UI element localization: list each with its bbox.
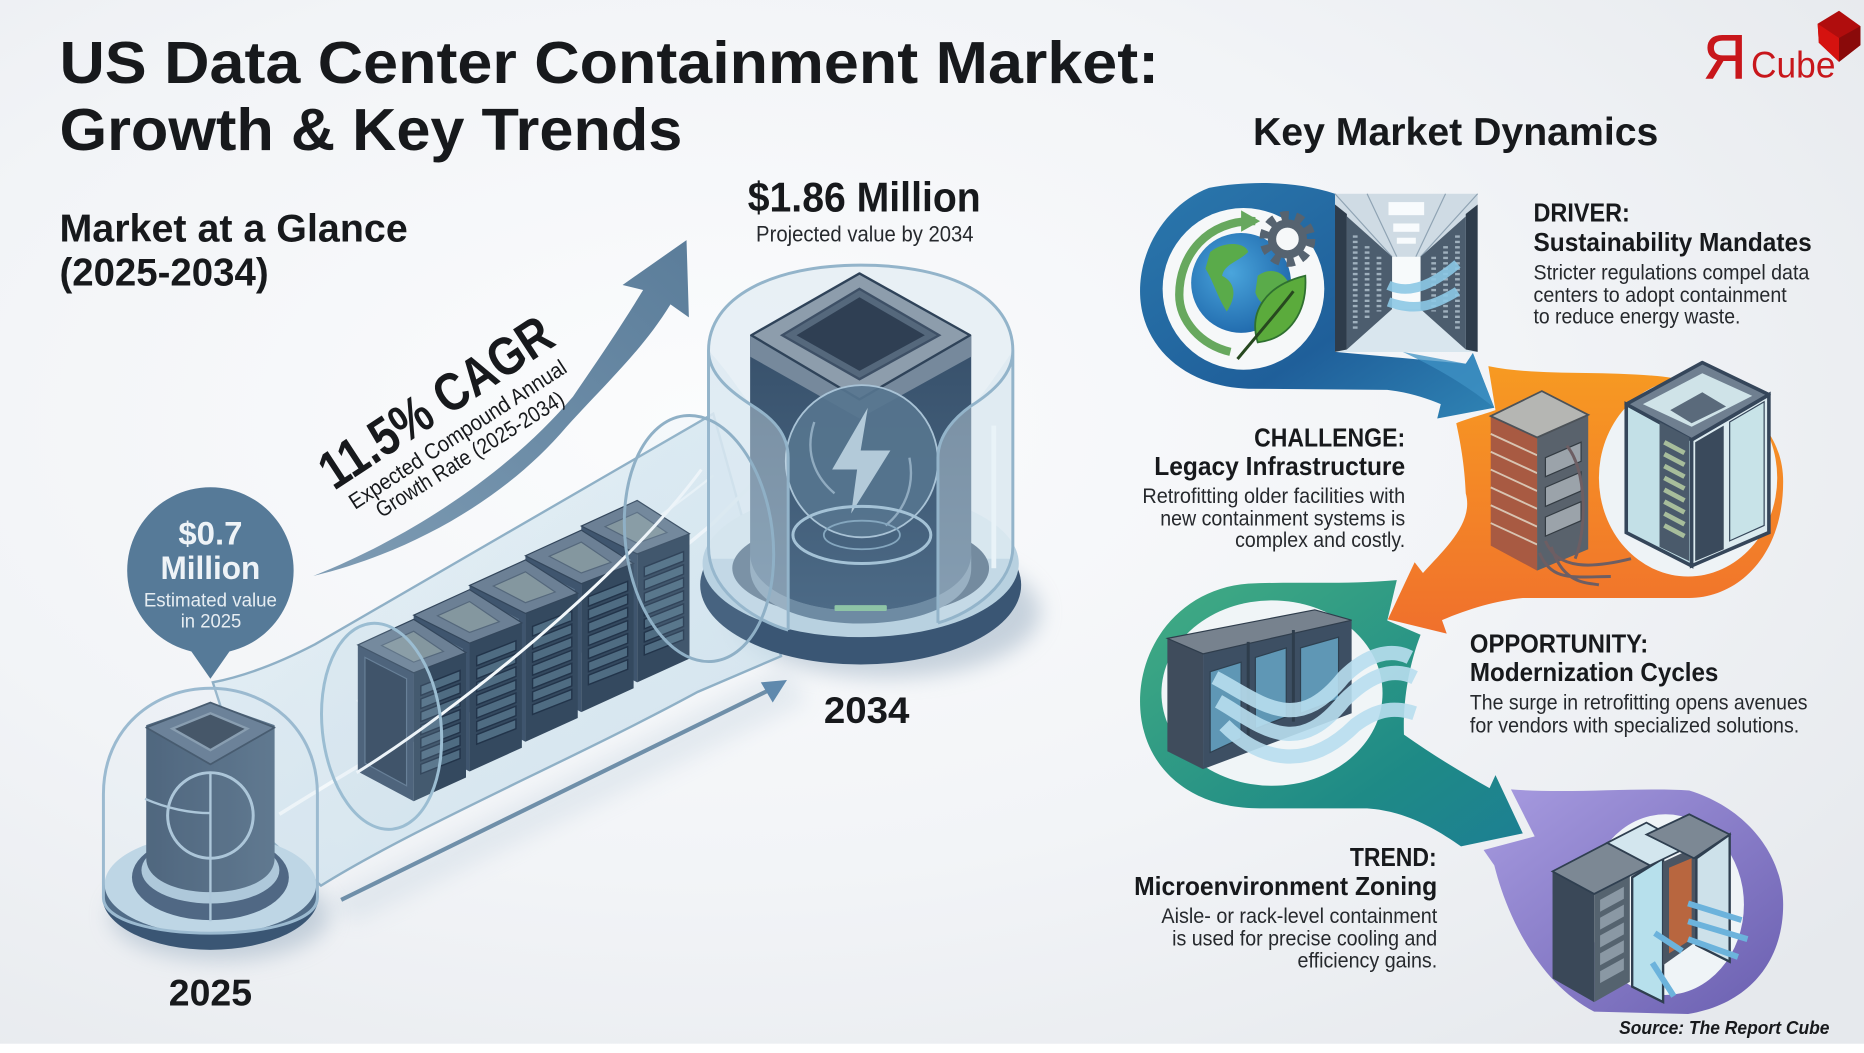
text: driver: Sustainability Mandates (1534, 227, 1812, 257)
text: trend: TREND: (1350, 842, 1437, 872)
label 2034: 2034 (824, 690, 910, 731)
text: driver (1534, 198, 1812, 328)
callout: 2034 value: $1.86 Million (748, 174, 981, 221)
arrow: growth swoosh (313, 240, 689, 576)
lower trend arrow (341, 680, 787, 900)
value bubble 2025: $0.7 (178, 515, 243, 551)
text: trend: is used for precise cooling and (1172, 927, 1437, 951)
text: driver: Stricter regulations compel data (1534, 260, 1809, 284)
text: opportunity (1470, 629, 1808, 737)
text: opportunity: OPPORTUNITY: (1470, 629, 1648, 659)
label 2025: 2025 (169, 973, 252, 1014)
heading: market at a glance: (2025-2034) (59, 250, 269, 294)
logo: RCube: Cube (1751, 44, 1835, 85)
text: challenge: CHALLENGE: (1254, 422, 1405, 452)
text: trend: Microenvironment Zoning (1134, 871, 1437, 901)
panel: opportunity shape (1140, 580, 1523, 846)
CAGR label: 11.5% CAGR (308, 305, 564, 501)
logo: RCube (1704, 11, 1860, 92)
logo: RCube: Я (1704, 23, 1746, 92)
text: challenge: new containment systems is (1160, 506, 1405, 530)
tube ring front (312, 617, 452, 835)
title: Growth & Key Trends (59, 96, 682, 163)
heading: market at a glance: Market at a Glance (59, 206, 408, 250)
tube ring end (611, 407, 787, 670)
small 2025 cylinder (102, 688, 319, 950)
value bubble 2025: in 2025 (181, 611, 241, 633)
value bubble 2025 (127, 487, 294, 679)
challenge icon: legacy rack and new cabinet (1491, 363, 1777, 585)
driver icon: earth and leaf (1163, 208, 1324, 370)
text: challenge: complex and costly. (1235, 528, 1405, 552)
text: opportunity: The surge in retrofitting opens avenues (1470, 691, 1808, 715)
text: trend: efficiency gains. (1298, 949, 1437, 973)
heading: key market dynamics: Key Market Dynamics (1253, 110, 1658, 154)
sphere with lightning (786, 385, 938, 537)
trend icon: aisle containment rack (1553, 814, 1748, 1002)
CAGR label: Expected Compound Annual (344, 355, 571, 514)
text: opportunity: Modernization Cycles (1470, 657, 1718, 687)
callout: 2034 value: Projected value by 2034 (756, 221, 974, 246)
callout: 2034 value (748, 174, 981, 246)
opportunity icon: racks with airflow (1161, 600, 1415, 786)
connecting glass tube (213, 414, 785, 886)
CAGR label: Growth Rate (2025-2034) (371, 386, 569, 523)
text: driver: centers to adopt containment (1534, 283, 1787, 307)
glass cabinet (1626, 363, 1769, 566)
panel: challenge shape (1388, 366, 1783, 634)
brick legacy rack (1491, 391, 1631, 585)
panel: driver shape (1140, 183, 1494, 418)
server racks in tube (357, 470, 701, 801)
text: driver: DRIVER: (1534, 198, 1630, 228)
value bubble 2025: Million (160, 550, 260, 586)
driver image: data center aisle (1335, 194, 1478, 352)
text: opportunity: for vendors with specialized solutions. (1470, 713, 1799, 737)
title: US Data Center Containment Market: (59, 29, 1159, 96)
text: driver: to reduce energy waste. (1534, 304, 1740, 328)
heading: market at a glance (59, 206, 408, 294)
text: challenge: Legacy Infrastructure (1154, 451, 1405, 481)
text: trend: Aisle- or rack-level containment (1161, 904, 1437, 928)
value bubble 2025: Estimated value (144, 589, 277, 611)
text: challenge (1142, 422, 1405, 552)
bottom white strip (0, 1044, 1864, 1053)
source note: Source: The Report Cube (1619, 1017, 1830, 1038)
text: challenge: Retrofitting older facilities with (1142, 484, 1405, 508)
title (59, 29, 1159, 163)
glass side panels (709, 351, 1013, 630)
large 2034 cylinder (700, 265, 1021, 665)
panel: trend shape (1484, 789, 1783, 1014)
text: trend (1134, 842, 1437, 973)
dome outline (709, 265, 1013, 630)
shadow under cylinders (111, 547, 1040, 961)
